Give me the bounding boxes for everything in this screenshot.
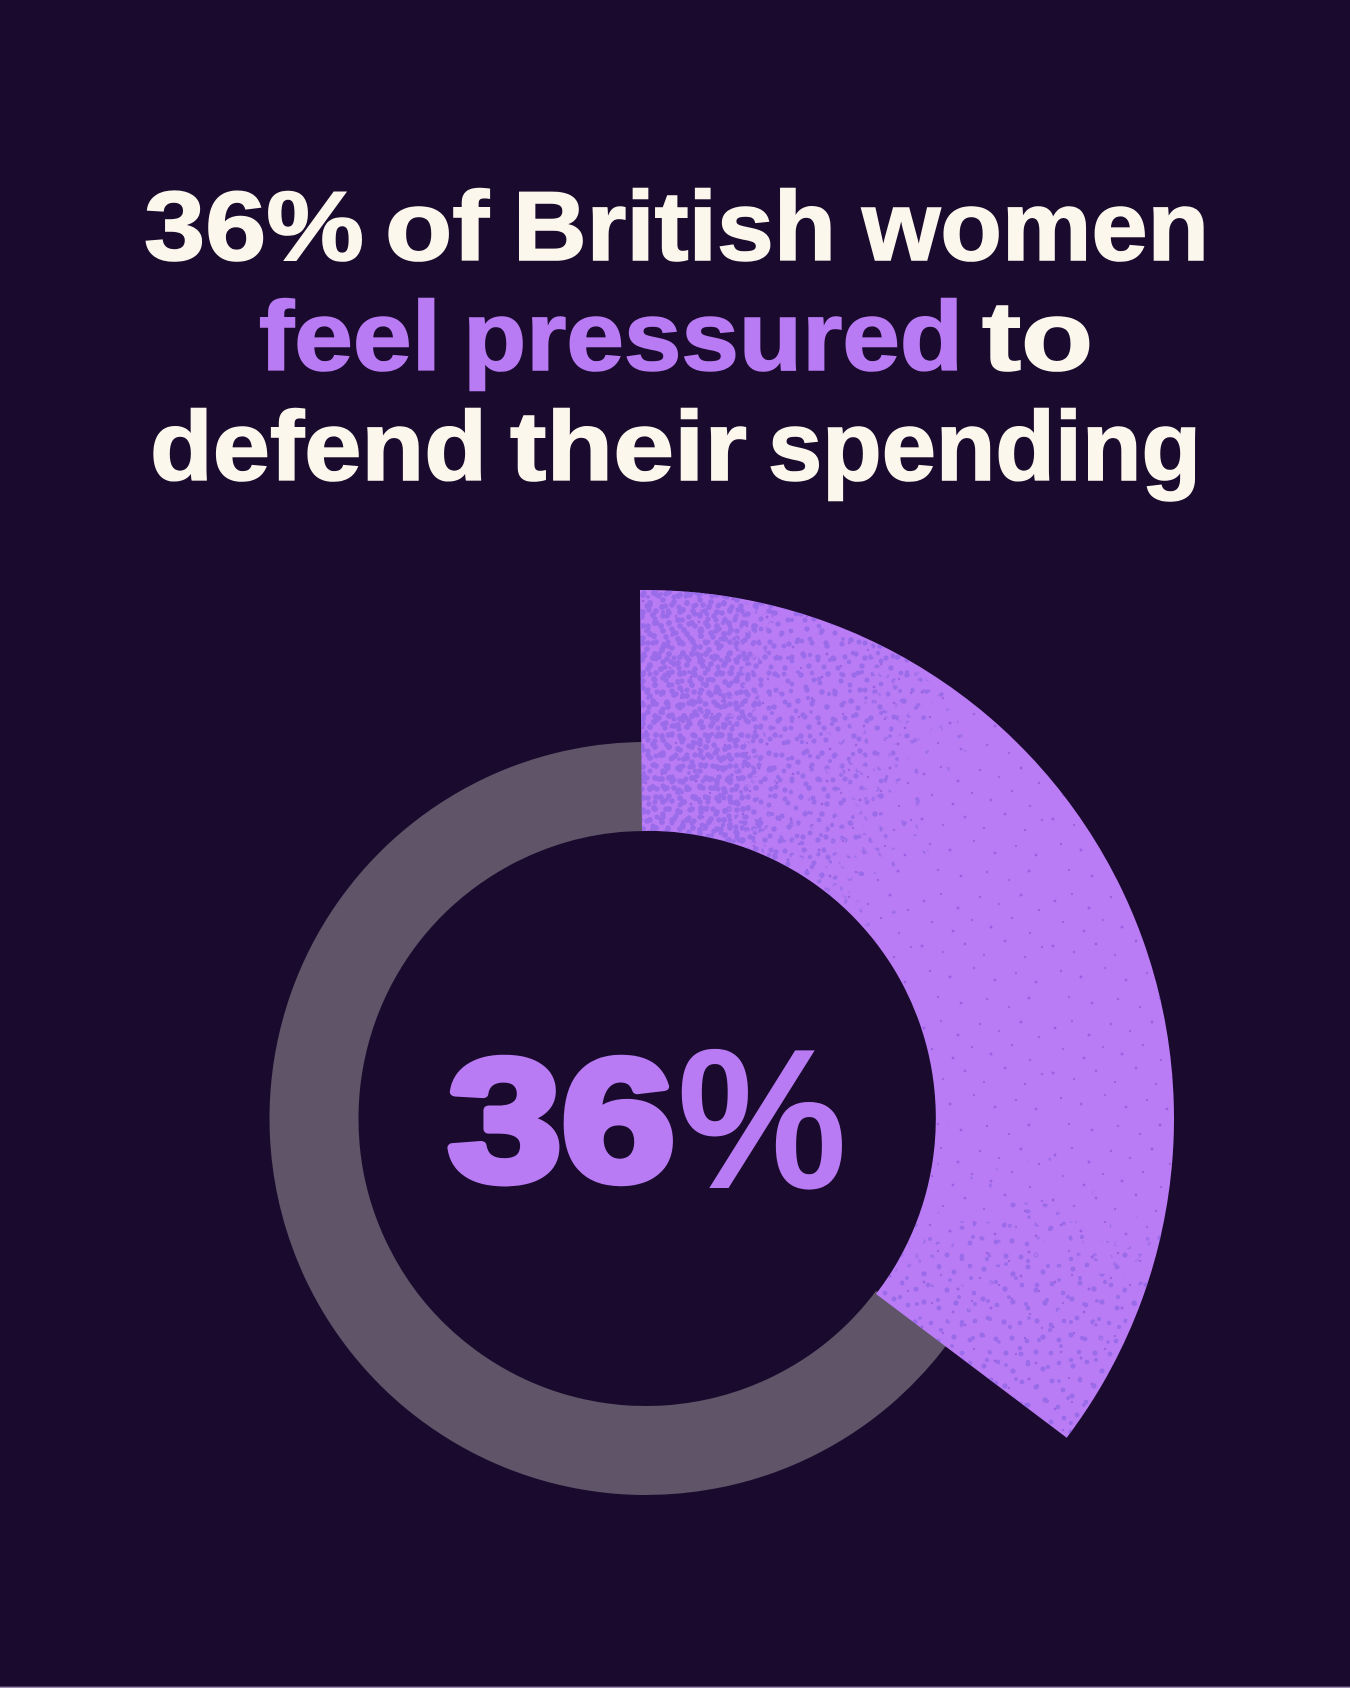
title line 3: their [510, 391, 747, 501]
title line 2 with highlighted phrase: to [982, 281, 1093, 391]
title line 3 [150, 391, 1201, 501]
bottom edge line [0, 1687, 1350, 1688]
title [144, 171, 1209, 501]
title line 1 [144, 171, 1209, 281]
title line 2 with highlighted phrase: pressured [463, 281, 963, 391]
remaining share ring [314, 786, 912, 1450]
highlighted 36% wedge with stipple texture [640, 590, 1174, 1438]
title line 1: 36% [144, 171, 364, 281]
title line 2 with highlighted phrase: feel [259, 281, 441, 391]
centre value 36% [448, 1008, 847, 1231]
donut chart [314, 560, 1220, 1460]
title line 2 with highlighted phrase [259, 281, 1093, 391]
centre value 36%: % [677, 1008, 847, 1231]
title line 3: spending [768, 391, 1201, 501]
centre value 36%: 36 [448, 1023, 675, 1217]
title line 1: British [513, 171, 836, 281]
title line 3: defend [150, 391, 487, 501]
title line 1: of [385, 171, 489, 281]
title line 1: women [861, 171, 1209, 281]
